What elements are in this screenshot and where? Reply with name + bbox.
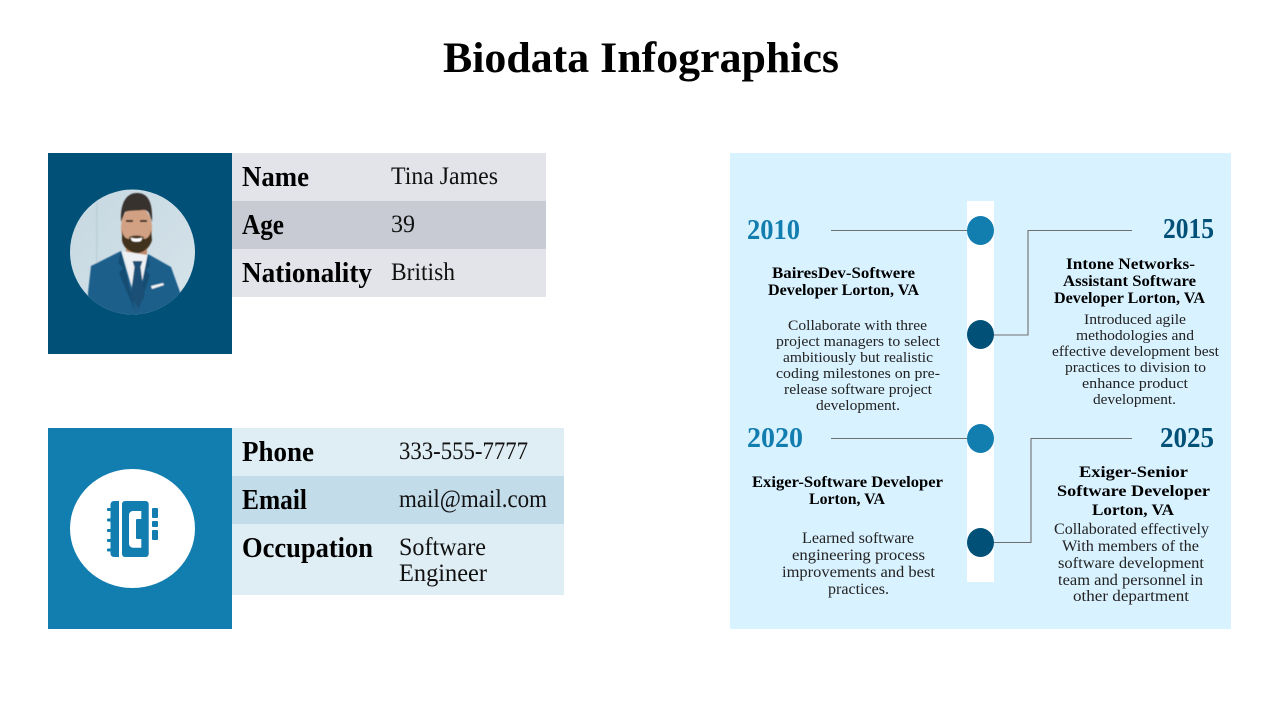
entry: 2015: enhance product (1082, 376, 1188, 392)
row: occupation (232, 524, 564, 595)
entry: 2015: Intone Networks- (1066, 256, 1195, 273)
icon: phone book (70, 469, 195, 588)
contact block (48, 428, 232, 629)
entry: 2025: Software Developer (1057, 483, 1210, 500)
panel: contact details (48, 428, 564, 629)
entry: 2010: BairesDev-Softwere (772, 265, 915, 282)
timeline spine (967, 201, 994, 582)
row: email: Email (242, 484, 307, 516)
entry: 2010: release software project (784, 382, 932, 398)
entry: 2020: improvements and best (782, 564, 936, 581)
entry: 2025: Exiger-Senior (1079, 464, 1188, 481)
entry: 2025 (1054, 423, 1214, 605)
row: occupation: Occupation (242, 532, 373, 564)
row: nationality (232, 249, 546, 297)
row: email (232, 476, 564, 524)
entry: 2010: project managers to select (776, 334, 940, 350)
row: occupation: Engineer (399, 560, 488, 587)
entry: 2010 (747, 215, 940, 414)
entry: 2015: 2015 (1163, 214, 1214, 245)
timeline dots (967, 216, 994, 557)
entry: 2015: practices to division to (1065, 360, 1206, 376)
entry: 2020: Exiger-Software Developer (752, 474, 943, 491)
connector lines (831, 230, 1132, 542)
entry: 2015: effective development best (1052, 344, 1219, 360)
row: name: Tina James (391, 163, 498, 190)
entry: 2015: Developer Lorton, VA (1054, 290, 1205, 307)
entry: 2020: practices. (828, 581, 889, 598)
entry: 2010: Developer Lorton, VA (768, 282, 919, 299)
panel: career timeline (730, 153, 1231, 629)
row: nationality: British (391, 259, 455, 286)
portrait photo (70, 189, 195, 318)
entry: 2025: team and personnel in (1058, 572, 1203, 589)
entry: 2015: Assistant Software (1063, 273, 1196, 290)
entry: 2010: 2010 (747, 215, 800, 246)
entry: 2025: 2025 (1160, 423, 1214, 454)
title: Biodata Infographics (443, 35, 839, 82)
row: age: Age (242, 209, 284, 241)
entry: 2020: 2020 (747, 423, 803, 454)
entry: 2020 (747, 423, 943, 598)
entry: 2020: engineering process (792, 547, 925, 564)
portrait block (48, 153, 232, 354)
entry: 2025: Collaborated effectively (1054, 521, 1209, 538)
row: name: Name (242, 161, 309, 193)
row: age (232, 201, 546, 249)
row: age: 39 (391, 211, 415, 238)
entry: 2025: software development (1058, 555, 1205, 572)
row: phone: Phone (242, 436, 314, 468)
row: phone: 333-555-7777 (399, 438, 528, 465)
row: name (232, 153, 546, 201)
entry: 2015: development. (1093, 392, 1176, 408)
entry: 2015: methodologies and (1076, 328, 1195, 344)
entry: 2010: ambitiously but realistic (783, 350, 933, 366)
entry: 2010: coding milestones on pre- (776, 366, 940, 382)
row: phone (232, 428, 564, 476)
panel: personal details (48, 153, 546, 354)
entry: 2015 (1052, 214, 1219, 408)
entry: 2010: development. (816, 398, 900, 414)
entry: 2025: Lorton, VA (1092, 502, 1174, 519)
entry: 2020: Learned software (802, 530, 914, 547)
entry: 2010: Collaborate with three (788, 318, 927, 334)
entry: 2015: Introduced agile (1084, 312, 1186, 328)
entry: 2025: other department (1073, 588, 1190, 605)
entry: 2025: With members of the (1062, 538, 1199, 555)
row: email: mail@mail.com (399, 486, 548, 513)
entry: 2020: Lorton, VA (809, 491, 885, 508)
row: occupation: Software (399, 534, 486, 561)
row: nationality: Nationality (242, 257, 372, 289)
